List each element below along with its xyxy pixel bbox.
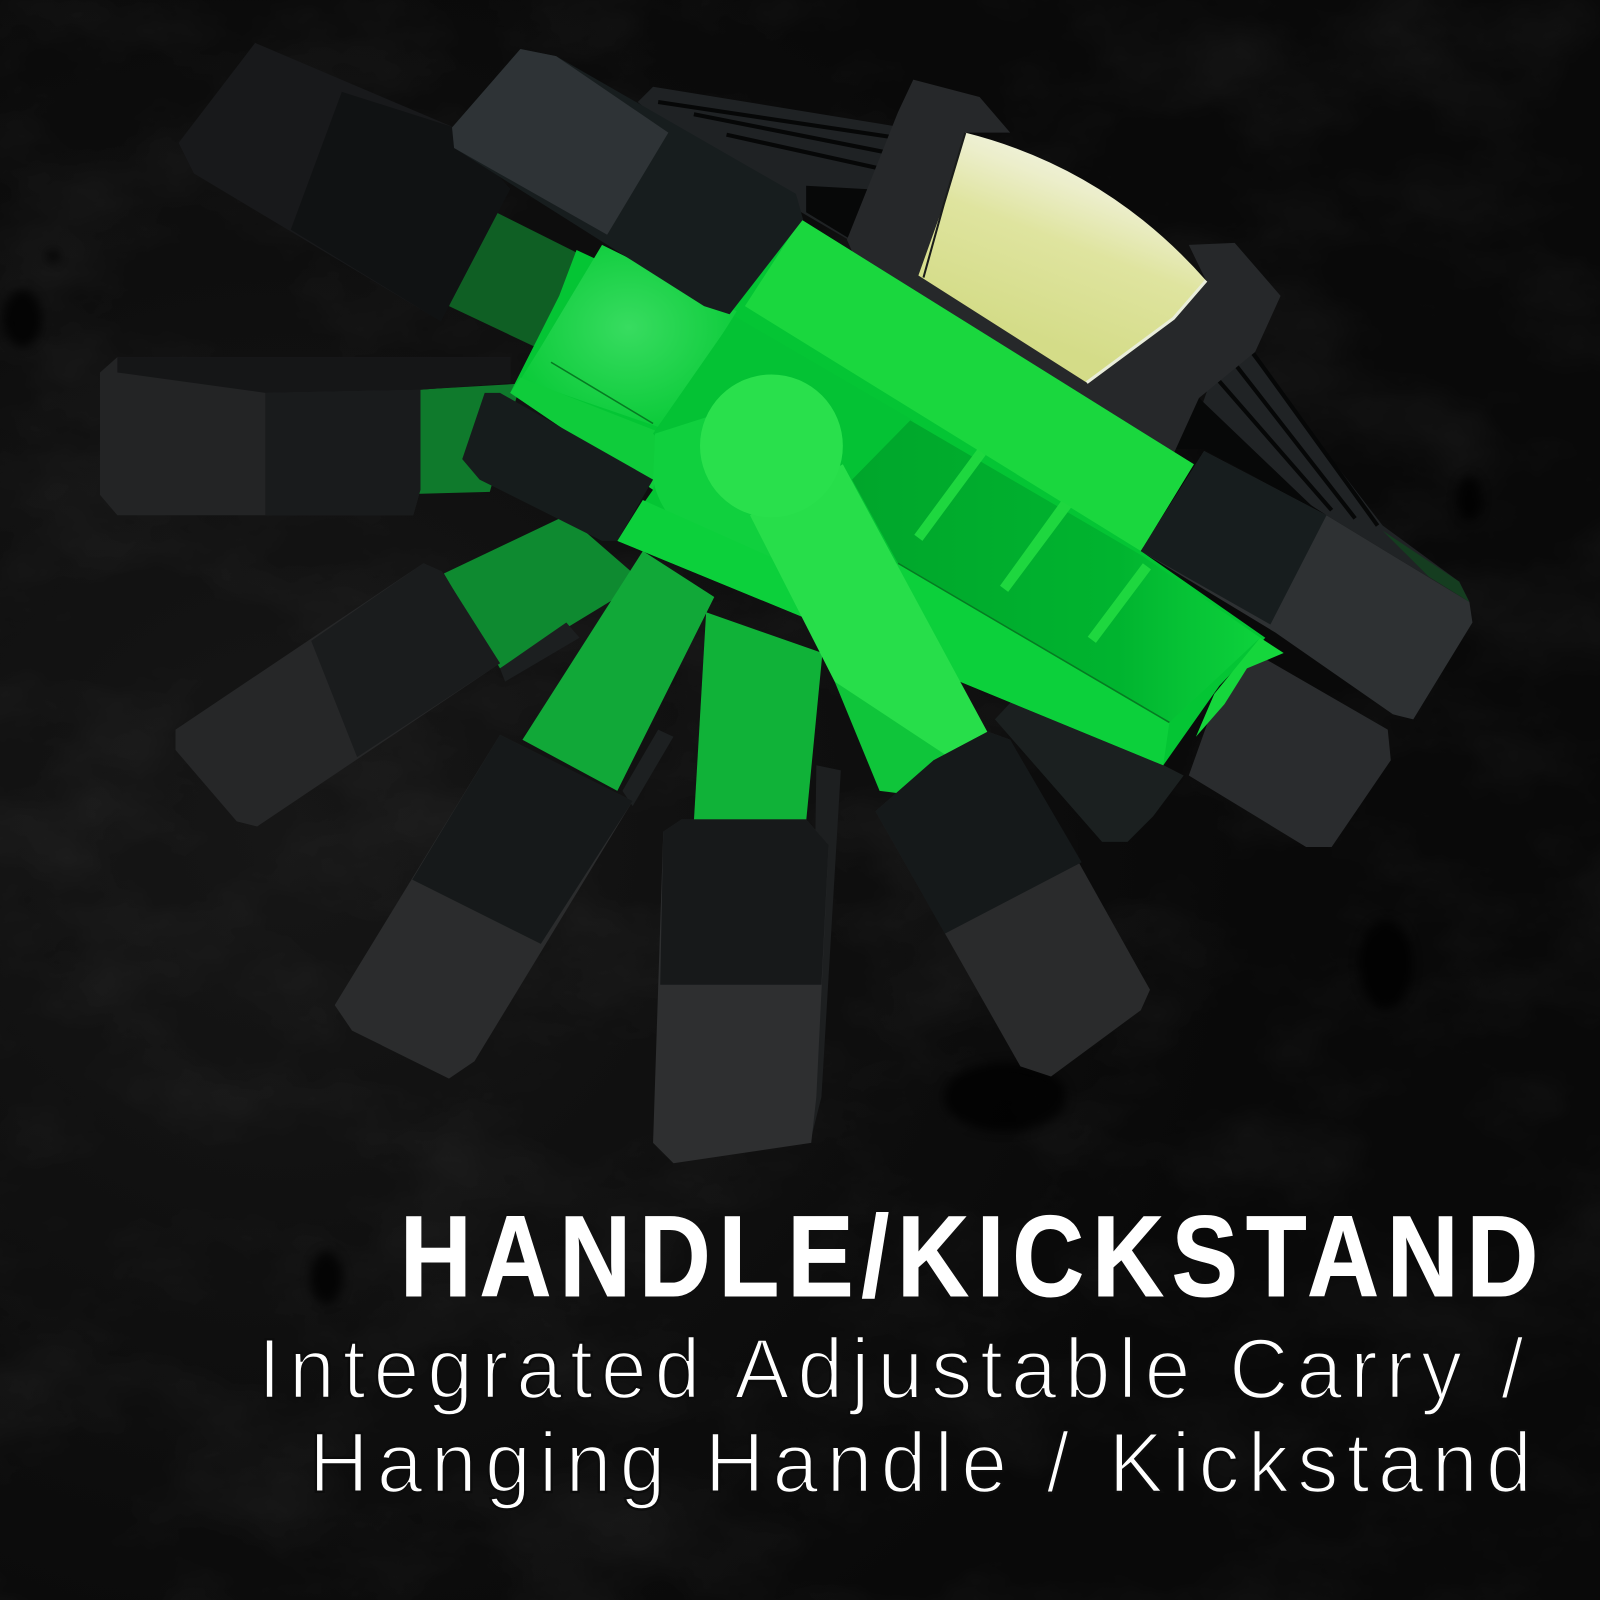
subheading line 2: Hanging Handle / Kickstand [309,1414,1532,1510]
top green band [745,219,1194,551]
ghost handle: diagonal position [335,551,714,1079]
lower body seam strip [510,378,663,490]
kickstand handle: front arm and pivot knob [700,374,988,794]
main light: green body [510,219,1284,765]
lamp head: rear stacked frames [638,87,1469,602]
centre panel [653,316,913,563]
ghost handle: top left position [179,43,582,352]
ghost handle: straight down position [653,612,841,1163]
left body panel highlight [520,245,737,429]
lamp head: right rubber pillar [1061,243,1281,454]
kickstand handle: front grip [876,732,1150,1077]
subheading line 1: Integrated Adjustable Carry / [258,1320,1524,1416]
ghost handle: lower left position [176,515,643,827]
main light: left lower bumper [462,393,653,541]
main light: top right bumper [1141,451,1472,719]
ribs [914,449,1151,643]
main light: lower bumper [995,653,1391,847]
heading: HANDLE/KICKSTAND [400,1192,1538,1321]
lamp head: left rubber pillar [847,80,1087,408]
lamp head: lens [918,133,1206,383]
bottom face [617,500,1169,765]
ribbed recess [852,420,1260,722]
ghost handle: left position [100,357,520,515]
main light: top left bumper [452,49,803,314]
pivot disc [653,408,816,561]
